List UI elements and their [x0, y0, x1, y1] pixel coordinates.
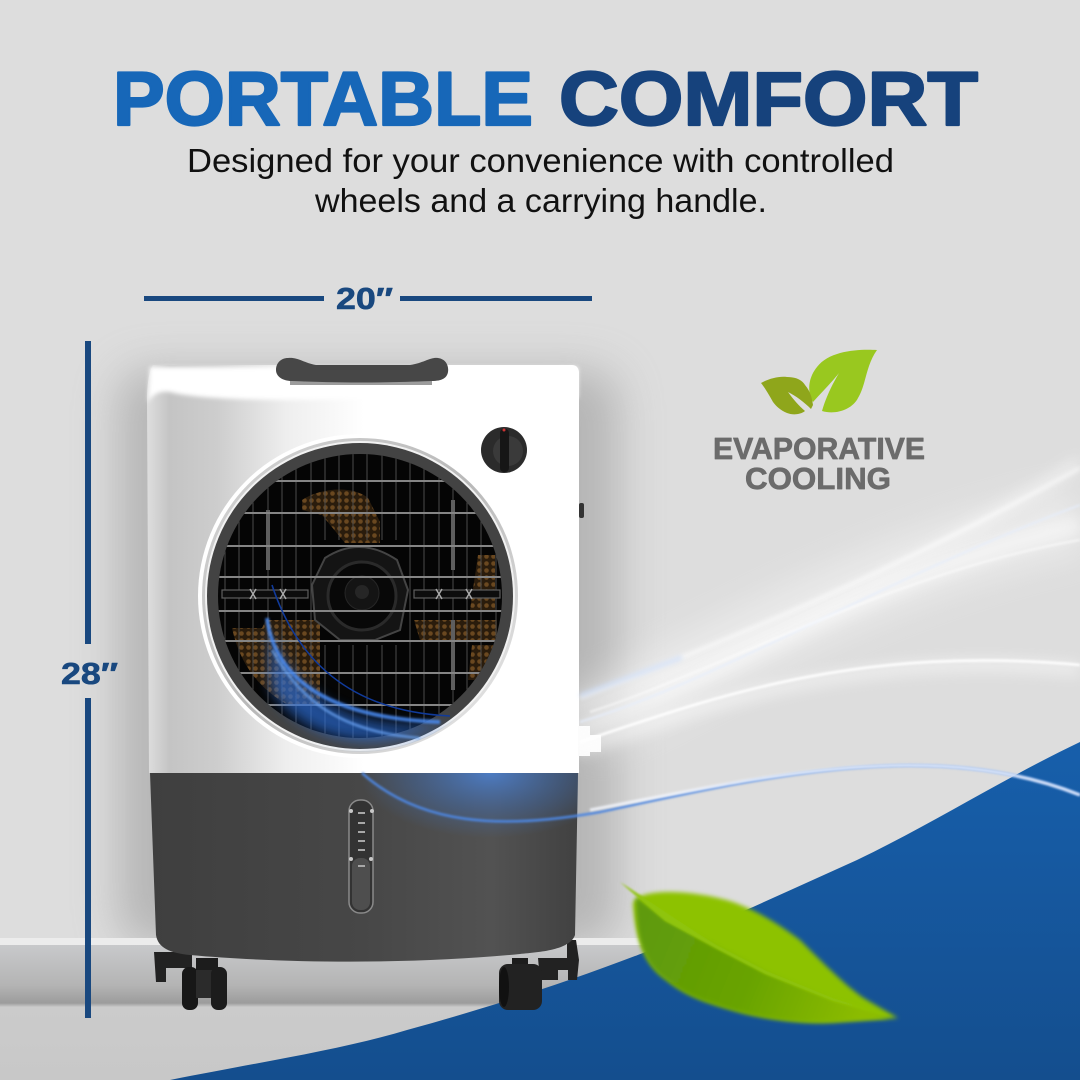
motor housing [312, 547, 408, 640]
height dimension: 28 inches [61, 341, 118, 1018]
left wheel [182, 958, 227, 1010]
leaf tip and midrib [620, 882, 893, 1017]
blue air swirl in grill [267, 585, 450, 741]
rear left caster bracket [154, 952, 192, 982]
title: COMFORT [559, 57, 978, 142]
icon: two green leaves [761, 350, 877, 414]
badge label: EVAPORATIVE [713, 431, 925, 466]
subtitle: Designed for your convenience with controlled [187, 142, 894, 179]
subtitle: wheels and a carrying handle. [314, 182, 767, 219]
badge label [713, 431, 925, 496]
horizontal grill bars [218, 480, 502, 706]
outer ring [198, 434, 522, 758]
centre cross rail [222, 589, 500, 599]
water level gauge [349, 800, 374, 913]
top panel highlight [148, 367, 578, 404]
control knob [481, 427, 527, 473]
width dimension: 20 inches [144, 281, 592, 316]
water tank base [150, 773, 578, 962]
width dimension: 20 inches: 20″ [336, 281, 393, 316]
drain fitting [578, 726, 601, 756]
dark gasket [207, 443, 513, 749]
grill interior [218, 454, 502, 738]
rear right caster bracket [538, 940, 579, 980]
cooler shadow on wall [118, 370, 618, 945]
grill struts [268, 500, 453, 690]
fan grill assembly [198, 434, 522, 760]
vertical grill bars [224, 454, 496, 738]
carrying handle [276, 358, 448, 385]
blue glow on tank [370, 773, 578, 832]
evaporative cooler product [147, 358, 601, 1010]
title [113, 57, 978, 142]
right wheel [499, 958, 542, 1010]
evaporative cooling badge [713, 350, 925, 496]
height dimension: 28 inches: 28″ [61, 656, 118, 691]
badge label: COOLING [745, 461, 891, 496]
white upper housing [147, 365, 579, 773]
subtitle [187, 142, 894, 219]
leaf body [633, 892, 898, 1022]
floor [0, 945, 700, 1080]
airflow streaks [362, 462, 1080, 821]
baseboard [0, 938, 700, 946]
leaf shaded underside [636, 897, 890, 1022]
cooling pad patches [232, 490, 497, 706]
title: PORTABLE [113, 57, 533, 142]
side connector [579, 503, 584, 518]
blue wave [170, 742, 1080, 1080]
green leaf foreground [620, 882, 898, 1022]
